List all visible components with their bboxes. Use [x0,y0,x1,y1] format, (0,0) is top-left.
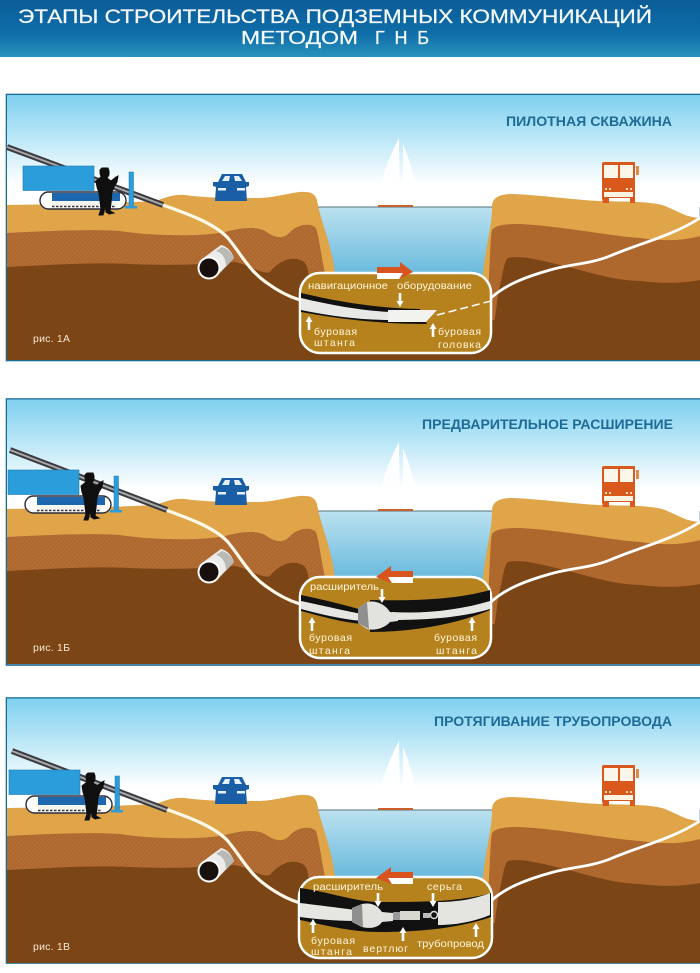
ground layers, water and borehole [7,795,700,963]
drill rod [10,450,167,510]
heading: ПРОТЯГИВАНИЕ ТРУБОПРОВОДА [434,714,672,729]
callout: reamer: буровая [309,632,352,644]
icon: sailboat [376,138,418,207]
sky [7,400,700,511]
drilling rig [9,770,123,813]
callout: pipe pulling assembly: трубопровод [417,938,484,950]
callout: reamer: штанга [309,645,350,657]
callout: pipe pulling assembly: штанга [311,946,352,958]
callout: reamer: буровая [434,632,477,644]
drill rod [7,147,163,205]
icon: operator [81,473,103,520]
callout: pipe pulling assembly: серьга [427,881,462,893]
figure label: рис. 1А [33,333,70,345]
icon: bus [602,765,639,806]
callout: pipe pulling assembly: буровая [311,935,355,947]
drill rod [12,751,167,810]
callout: pipe pulling assembly: расширитель [313,881,384,893]
arrow: reaming direction [376,566,413,583]
callout: drill head: навигационное [308,280,388,292]
title banner: ЭТАПЫ СТРОИТЕЛЬСТВА ПОДЗЕМНЫХ КОММУНИКАЦИЙ [18,4,652,28]
drilling rig [23,166,137,209]
callout: pipe pulling assembly [299,877,492,958]
panel: pipeline pull-back [6,698,700,963]
arrow: drilling direction [377,262,413,279]
heading: ПРЕДВАРИТЕЛЬНОЕ РАСШИРЕНИЕ [422,417,673,432]
icon: car [213,478,249,505]
callout: reamer: штанга [436,645,477,657]
heading: ПИЛОТНАЯ СКВАЖИНА [506,114,672,129]
icon: sailboat [376,741,418,810]
figure label: рис. 1В [33,941,70,953]
callout: drill head: буровая [314,326,357,338]
callout: reamer [300,577,491,658]
callout: reamer: расширитель [310,581,380,593]
title banner: Г Н Б [375,28,429,48]
callout: drill head: головка [438,339,481,351]
icon: sailboat [376,442,418,511]
panel: pilot borehole [6,94,700,360]
callout: pipe pulling assembly: вертлюг [363,943,408,955]
icon: operator [96,168,118,215]
callout: drill head: буровая [438,326,481,338]
icon: operator [82,773,104,820]
callout: drill head [300,273,491,353]
icon: bus [602,466,639,507]
drilling rig [8,470,122,514]
icon: car [213,777,249,804]
figure label: рис. 1Б [33,642,70,654]
arrow: pull direction [376,867,413,884]
callout: drill head: штанга [314,337,355,349]
panel: preliminary reaming [6,399,700,665]
icon: bus [602,162,639,203]
title banner: МЕТОДОМ [241,28,358,48]
icon: car [213,174,249,201]
ground layers, water and borehole [7,496,700,664]
sky [7,698,700,810]
callout: drill head: оборудование [397,280,472,292]
title banner [0,0,700,57]
ground layers, water and borehole [7,192,700,360]
sky [7,95,700,207]
